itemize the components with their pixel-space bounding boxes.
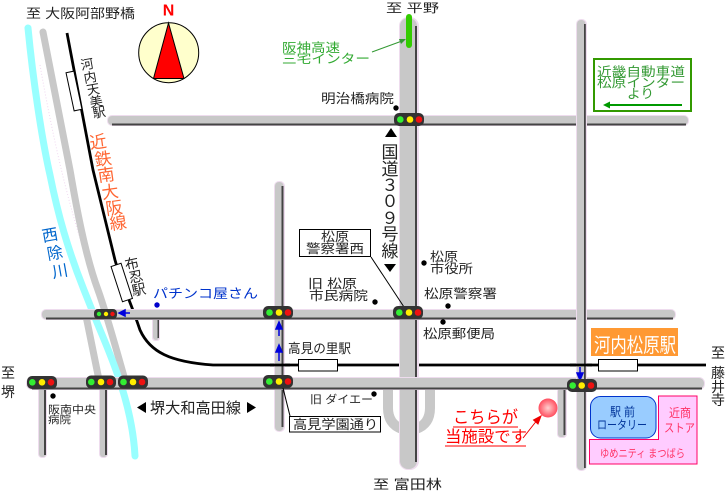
label: 河内天美駅: 河内天美駅 [79, 56, 107, 121]
dot: 市役所 [421, 260, 427, 266]
callout: 松原警察署西: 警察署西 [306, 241, 364, 256]
callout: 高見学園通り [283, 388, 380, 432]
panel: 駅前ロータリー: 駅 前 [610, 404, 635, 419]
dot: 郵便局 [440, 319, 446, 325]
traffic light: left 3 [118, 376, 148, 388]
panel: ゆめニティ まつばら: 近商 [669, 406, 691, 420]
vertical road: 高見学園通り [274, 181, 285, 432]
label: 旧 松原市民病院 [308, 277, 368, 303]
middle horizontal road [41, 309, 676, 320]
short road: left 1 [38, 385, 47, 458]
blue arrow: up 1 [276, 322, 282, 336]
panel: 駅前ロータリー [590, 396, 656, 438]
green interchange marker [406, 14, 412, 48]
label: 阪南中央病院: 病院 [48, 414, 72, 426]
label: 近鉄南大阪線: 近鉄南大阪線 [88, 132, 128, 234]
railway over 高見学園通り [270, 364, 290, 366]
traffic light: 阪南中央 [27, 376, 57, 389]
label: 阪南中央病院 [48, 403, 97, 426]
traffic light: 明治橋 [394, 113, 424, 126]
label: 堺大和高田線: 堺大和高田線 [150, 400, 241, 417]
faint dotted line beside diagonal road [40, 65, 113, 330]
station box: 高見の里駅 [298, 360, 338, 371]
traffic light: 松原警察署西 [393, 306, 423, 319]
dot: 明治橋病院 [393, 105, 399, 111]
label: 松原 市役所: 松原 [430, 250, 458, 264]
label: 松原郵便局: 松原郵便局 [423, 327, 495, 341]
label: 阪神高速 三宅インター: 阪神高速 [282, 40, 341, 55]
upper horizontal road [107, 115, 689, 126]
compass [139, 2, 199, 83]
label: 明治橋病院: 明治橋病院 [321, 91, 394, 106]
dot: 阪南中央病院 [50, 393, 56, 399]
railway over right road [570, 364, 592, 366]
traffic light: 高見学園通り [263, 375, 293, 388]
label: 旧 ダイエー: 旧 ダイエー [310, 392, 373, 406]
station box: 布忍駅 [111, 263, 132, 302]
label: 高見の里駅: 高見の里駅 [288, 341, 351, 356]
lower horizontal road: 堺大和高田線 [26, 377, 705, 390]
station sign: 河内松原駅: 河内松原駅 [594, 334, 676, 357]
box: 近畿自動車道 松原インターより [594, 59, 691, 111]
river: 西除川 [28, 28, 135, 456]
short side road at 河内松原 [557, 388, 567, 438]
label: こちらが当施設です: こちらが [453, 408, 518, 427]
label: 布忍駅: 布忍駅 [123, 254, 147, 299]
label: 至 大阪阿部野橋: 至 大阪阿部野橋 [26, 6, 135, 21]
marker: facility ball [538, 398, 558, 418]
panel: 駅前ロータリー: ロータリー [597, 418, 647, 432]
label: 松原警察署: 松原警察署 [424, 286, 497, 301]
triangle up: 国道 [385, 128, 397, 137]
triangle down: 国道 [384, 264, 396, 272]
label: 阪神高速 三宅インター: 三宅インター [282, 52, 370, 66]
blue arrow: down to signal [577, 367, 583, 380]
box: 近畿自動車道 松原インターより: 松原インター [597, 76, 685, 90]
blue arrow: left to パチンコ [119, 310, 130, 316]
traffic light: 河内松原駅前 [567, 379, 597, 392]
traffic light: 市民病院前 [263, 306, 293, 319]
arrow to 三宅インター [372, 39, 406, 52]
callout: 松原警察署西: 松原 [321, 230, 349, 244]
label: 国道309号線: 国道３０９号線 [382, 143, 398, 261]
traffic light: left 2 [86, 376, 116, 388]
label: 旧 松原市民病院: 市民病院 [309, 289, 368, 303]
arrow to facility [523, 416, 541, 438]
label: 阪南中央病院: 阪南中央 [48, 403, 97, 416]
blue arrow: up 2 [276, 345, 282, 361]
label: 至 藤井寺: 至藤井寺 [711, 345, 725, 408]
label: 阪神高速 三宅インター [282, 40, 370, 66]
label: 至 富田林: 至 富田林 [373, 477, 442, 492]
label: 松原 市役所 [430, 250, 474, 276]
railway: 近鉄南大阪線 [67, 33, 706, 365]
station box: 河内松原駅 [598, 360, 638, 371]
panel: ゆめニティ まつばら [590, 396, 697, 464]
box: 近畿自動車道 松原インターより: より [627, 87, 654, 101]
callout: 高見学園通り: 高見学園通り [293, 417, 378, 432]
label: 至 平野: 至 平野 [386, 1, 439, 15]
label: 旧 松原市民病院: 旧 松原 [308, 277, 357, 291]
label: パチンコ屋さん: パチンコ屋さん [153, 286, 258, 301]
callout: 松原警察署西 [300, 230, 404, 307]
main vertical road: 国道309号線 [399, 17, 419, 470]
short side road at パチンコ屋 [152, 317, 160, 341]
box: 近畿自動車道 松原インターより: 近畿自動車道 [597, 64, 686, 79]
panel: ゆめニティ まつばら: ゆめニティ まつばら [600, 447, 685, 460]
dot: パチンコ屋 [154, 302, 160, 308]
station sign: 河内松原駅 [591, 328, 678, 357]
compass: N [163, 2, 174, 20]
label: こちらが当施設です: 当施設です [445, 428, 527, 446]
label: こちらが当施設です [445, 408, 527, 446]
right vertical road [576, 19, 587, 471]
panel: ゆめニティ まつばら: ストア [664, 421, 695, 435]
short road: left 2 [99, 385, 108, 458]
label: 松原 市役所: 市役所 [430, 261, 474, 276]
dot: 市民病院 [372, 299, 378, 305]
label: 西除川: 西除川 [41, 226, 69, 282]
dot: ダイエー [371, 391, 377, 397]
dot: 警察署 [445, 303, 451, 309]
label: 至 堺: 至堺 [1, 365, 15, 400]
station box: 河内天美駅 [66, 71, 82, 111]
U-turn ramp [388, 386, 430, 429]
traffic light: 布忍 [94, 309, 117, 319]
diagonal gray road [43, 32, 125, 380]
